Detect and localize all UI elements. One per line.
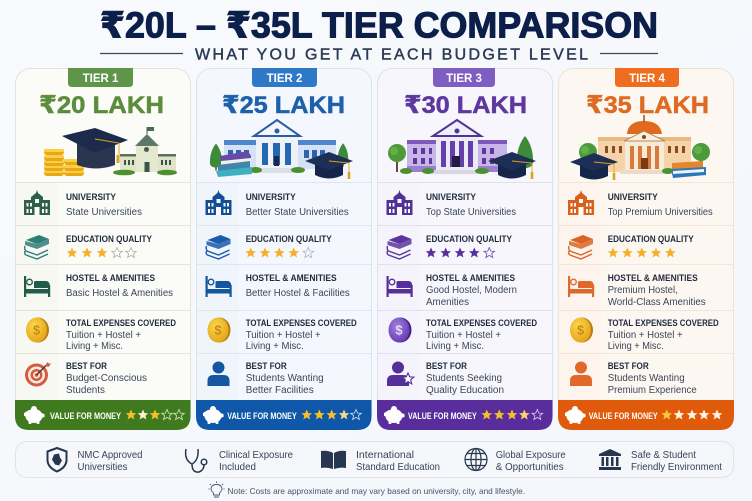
tier 2 row: hostel and amenities: Better Hostel & Facilities — [246, 288, 350, 299]
tier 3 row: university — [378, 182, 552, 218]
tier 3 row: education quality — [378, 226, 552, 259]
tier 3 price: ₹30 LAKH — [404, 92, 527, 119]
tier 3 row: university: Top State Universities — [426, 207, 516, 218]
NMC approved text — [78, 450, 143, 473]
tier 4 row: total expenses: Living + Misc. — [608, 341, 664, 352]
tier 1 row: education quality: EDUCATION QUALITY — [66, 234, 152, 244]
clinical exposure text — [219, 450, 293, 473]
tier 3 row: best for: Students Seeking — [426, 373, 502, 384]
icon: light bulb — [208, 482, 224, 497]
tier 4 row: university: Top Premium Universities — [608, 207, 713, 218]
icon: stethoscope — [186, 449, 207, 472]
tier 4 row: total expenses: TOTAL EXPENSES COVERED — [608, 318, 719, 328]
tier 2 row: hostel and amenities: HOSTEL & AMENITIES — [246, 273, 337, 283]
tier 3 row: hostel and amenities: HOSTEL & AMENITIES — [426, 273, 515, 283]
tier 2 row: total expenses: Living + Misc. — [246, 341, 304, 352]
safe and student friendly text: Friendly Environment — [631, 462, 722, 473]
tier 4 row: total expenses: Tuition + Hostel + — [608, 330, 683, 341]
tier 3 row: total expenses: TOTAL EXPENSES COVERED — [426, 318, 537, 328]
NMC approved text: Universities — [78, 462, 128, 473]
tier 3 row: hostel and amenities — [378, 264, 552, 308]
tier 2 row: best for: Better Facilities — [246, 385, 314, 396]
tier 1 row: university: State Universities — [66, 207, 142, 218]
tier 3 illustration: college, trees and cap — [388, 120, 536, 179]
icon: shield — [48, 448, 66, 472]
tier 3 row: education quality: EDUCATION QUALITY — [426, 234, 512, 244]
international standard education text: Standard Education — [356, 462, 440, 473]
subtitle: WHAT YOU GET AT EACH BUDGET LEVEL — [195, 46, 588, 64]
tier 2 price: ₹25 LAKH — [222, 92, 345, 119]
tier 2 row: total expenses: Tuition + Hostel + — [246, 330, 321, 341]
tier 3 row: best for: BEST FOR — [426, 361, 467, 371]
tier 4 row: best for: Premium Experience — [608, 385, 697, 396]
tier 1 row: education quality — [16, 226, 190, 259]
tier 2 value for money bar — [196, 400, 372, 430]
note — [208, 482, 525, 497]
clinical exposure text: Clinical Exposure — [219, 450, 293, 461]
tier 1 row: hostel and amenities — [16, 264, 190, 299]
global exposure text: Global Exposure — [496, 450, 566, 461]
tier 1 row: hostel and amenities: HOSTEL & AMENITIES — [66, 273, 155, 283]
tier 4 row: education quality — [559, 226, 733, 259]
tier 2 illustration: college, books and cap — [210, 120, 353, 179]
tier 2 row: education quality — [197, 226, 371, 259]
panel: tier 3 — [377, 68, 552, 430]
tier 3 value for money bar — [377, 400, 552, 430]
tier 1 row: university — [16, 182, 190, 218]
tier 2 row: best for — [197, 354, 371, 396]
tier 2 row: university — [197, 182, 371, 218]
tier 2 badge — [252, 68, 317, 87]
tier 2 row: total expenses: TOTAL EXPENSES COVERED — [246, 318, 357, 328]
tier 4 row: best for: BEST FOR — [608, 361, 649, 371]
tier 4 value for money bar: VALUE FOR MONEY — [589, 411, 658, 422]
tier 1 row: hostel and amenities: Basic Hostel & Amenities — [66, 288, 173, 299]
tier 3 badge: TIER 3 — [446, 73, 482, 85]
tier 1 badge: TIER 1 — [83, 73, 119, 85]
tier 4 row: hostel and amenities: HOSTEL & AMENITIES — [608, 273, 698, 283]
tier 4 row: best for — [559, 354, 733, 396]
panel: tier 1 — [15, 68, 190, 430]
tier 4 row: hostel and amenities: World-Class Amenities — [608, 297, 706, 308]
tier 3 row: total expenses: Tuition + Hostel + — [426, 330, 501, 341]
tier 4 row: best for: Students Wanting — [608, 373, 685, 384]
tier 4 row: hostel and amenities — [559, 264, 733, 308]
tier 2 row: hostel and amenities — [197, 264, 371, 299]
tier 1 row: university: UNIVERSITY — [66, 192, 116, 202]
tier 4 value for money bar — [558, 400, 734, 430]
tier 3 row: best for — [378, 354, 552, 396]
tier 4 row: university: UNIVERSITY — [608, 192, 658, 202]
tier 4 row: hostel and amenities: Premium Hostel, — [608, 285, 678, 296]
tier 1 illustration: cap, coins and college — [44, 127, 177, 176]
icon: institution — [599, 449, 621, 470]
tier 2 row: best for: Students Wanting — [246, 373, 324, 384]
tier 3 badge — [433, 68, 495, 87]
tier 1 row: best for: Students — [66, 385, 105, 396]
safe and student friendly text — [631, 450, 722, 473]
tier 4 badge — [615, 68, 679, 87]
icon: open book — [321, 451, 346, 469]
tier 1 row: total expenses: TOTAL EXPENSES COVERED — [66, 318, 176, 328]
benefits strip — [16, 442, 734, 478]
tier 4 badge: TIER 4 — [629, 73, 665, 85]
international standard education text — [356, 450, 440, 473]
icon: globe — [465, 448, 487, 470]
clinical exposure text: Included — [219, 462, 256, 473]
tier 1 row: best for: Budget-Conscious — [66, 373, 147, 384]
tier 3 row: best for: Quality Education — [426, 385, 504, 396]
tier 3 row: total expenses: Living + Misc. — [426, 341, 484, 352]
title: ₹20L – ₹35L TIER COMPARISON — [100, 4, 658, 46]
note: Note: Costs are approximate and may vary based on university, city, and lifestyle. — [228, 486, 525, 496]
tier 2 value for money bar: VALUE FOR MONEY — [227, 411, 297, 422]
international standard education text: International — [356, 450, 414, 461]
NMC approved text: NMC Approved — [78, 450, 143, 461]
panel: tier 2 — [196, 68, 372, 430]
tier 2 row: total expenses — [197, 310, 371, 352]
tier 3 row: total expenses — [378, 310, 552, 352]
tier 4 row: education quality: EDUCATION QUALITY — [608, 234, 694, 244]
tier 1 value for money bar: VALUE FOR MONEY — [50, 411, 122, 422]
tier 1 row: best for — [16, 354, 190, 396]
tier 3 value for money bar: VALUE FOR MONEY — [408, 411, 477, 422]
global exposure text: & Opportunities — [496, 462, 564, 473]
tier 4 row: university — [559, 182, 733, 218]
tier 2 row: university: UNIVERSITY — [246, 192, 296, 202]
tier 2 row: university: Better State Universities — [246, 207, 349, 218]
tier 1 badge — [68, 68, 133, 87]
global exposure text — [496, 450, 566, 473]
tier 1 row: best for: BEST FOR — [66, 361, 107, 371]
tier 4 row: total expenses — [559, 310, 733, 352]
tier 4 illustration: domed college, cap and books — [570, 115, 710, 180]
tier 4 price: ₹35 LAKH — [586, 92, 709, 119]
tier 3 row: hostel and amenities: Amenities — [426, 297, 469, 308]
tier 3 row: hostel and amenities: Good Hostel, Modern — [426, 285, 517, 296]
safe and student friendly text: Safe & Student — [631, 450, 696, 461]
tier 3 row: university: UNIVERSITY — [426, 192, 476, 202]
tier 2 row: best for: BEST FOR — [246, 361, 287, 371]
tier 2 badge: TIER 2 — [267, 73, 302, 85]
panel: tier 4 — [558, 68, 734, 430]
tier 1 row: total expenses: Tuition + Hostel + — [66, 330, 141, 341]
tier 1 row: total expenses: Living + Misc. — [66, 341, 123, 352]
tier 2 row: education quality: EDUCATION QUALITY — [246, 234, 332, 244]
tier 1 price: ₹20 LAKH — [39, 92, 164, 119]
tier 1 value for money bar — [15, 400, 190, 430]
tier 1 row: total expenses — [16, 310, 190, 352]
